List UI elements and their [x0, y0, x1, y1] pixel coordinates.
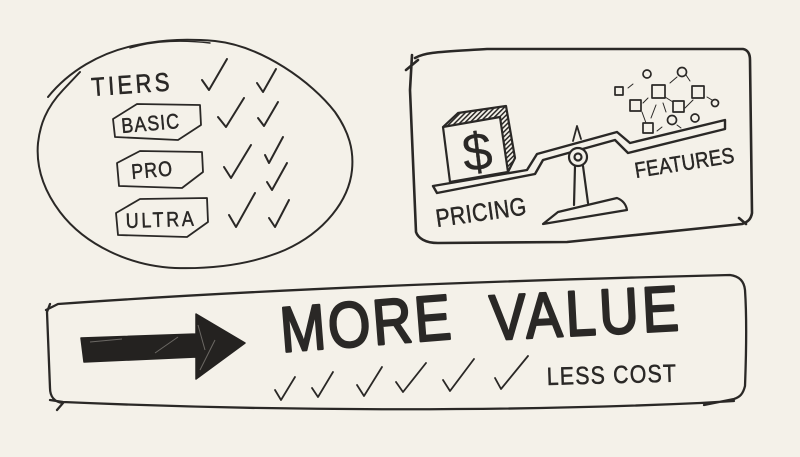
tag: pro: [117, 151, 203, 188]
tag: basic: [113, 104, 201, 140]
banner outline: [46, 275, 746, 410]
heading: tiers: TIERS: [90, 68, 170, 102]
tag: pro: PRO: [130, 157, 173, 184]
tilted balance beam: [433, 120, 725, 193]
feature network: [615, 68, 718, 133]
dollar sign: $: [459, 121, 496, 184]
label: pricing: PRICING: [434, 192, 528, 232]
tag: basic: BASIC: [120, 110, 180, 138]
heading: more value: MORE: [277, 281, 453, 366]
fulcrum stand: [543, 126, 627, 224]
panel: pricing versus features scale: [406, 49, 752, 243]
row of check marks: [275, 356, 528, 400]
tag: ultra: ULTRA: [125, 207, 194, 233]
panel: tiers: [38, 40, 352, 268]
tiers ellipse outline: [38, 40, 352, 268]
solid arrow: [81, 314, 245, 379]
panel: more value: [46, 272, 746, 410]
scale panel outline: [406, 49, 752, 243]
label: features: FEATURES: [633, 144, 736, 183]
tier check marks: [202, 59, 289, 227]
tag: ultra: [116, 198, 208, 237]
heading: more value: [277, 272, 680, 366]
heading: more value: VALUE: [488, 272, 680, 354]
money block: [443, 106, 515, 184]
label: less cost: LESS COST: [546, 359, 676, 390]
